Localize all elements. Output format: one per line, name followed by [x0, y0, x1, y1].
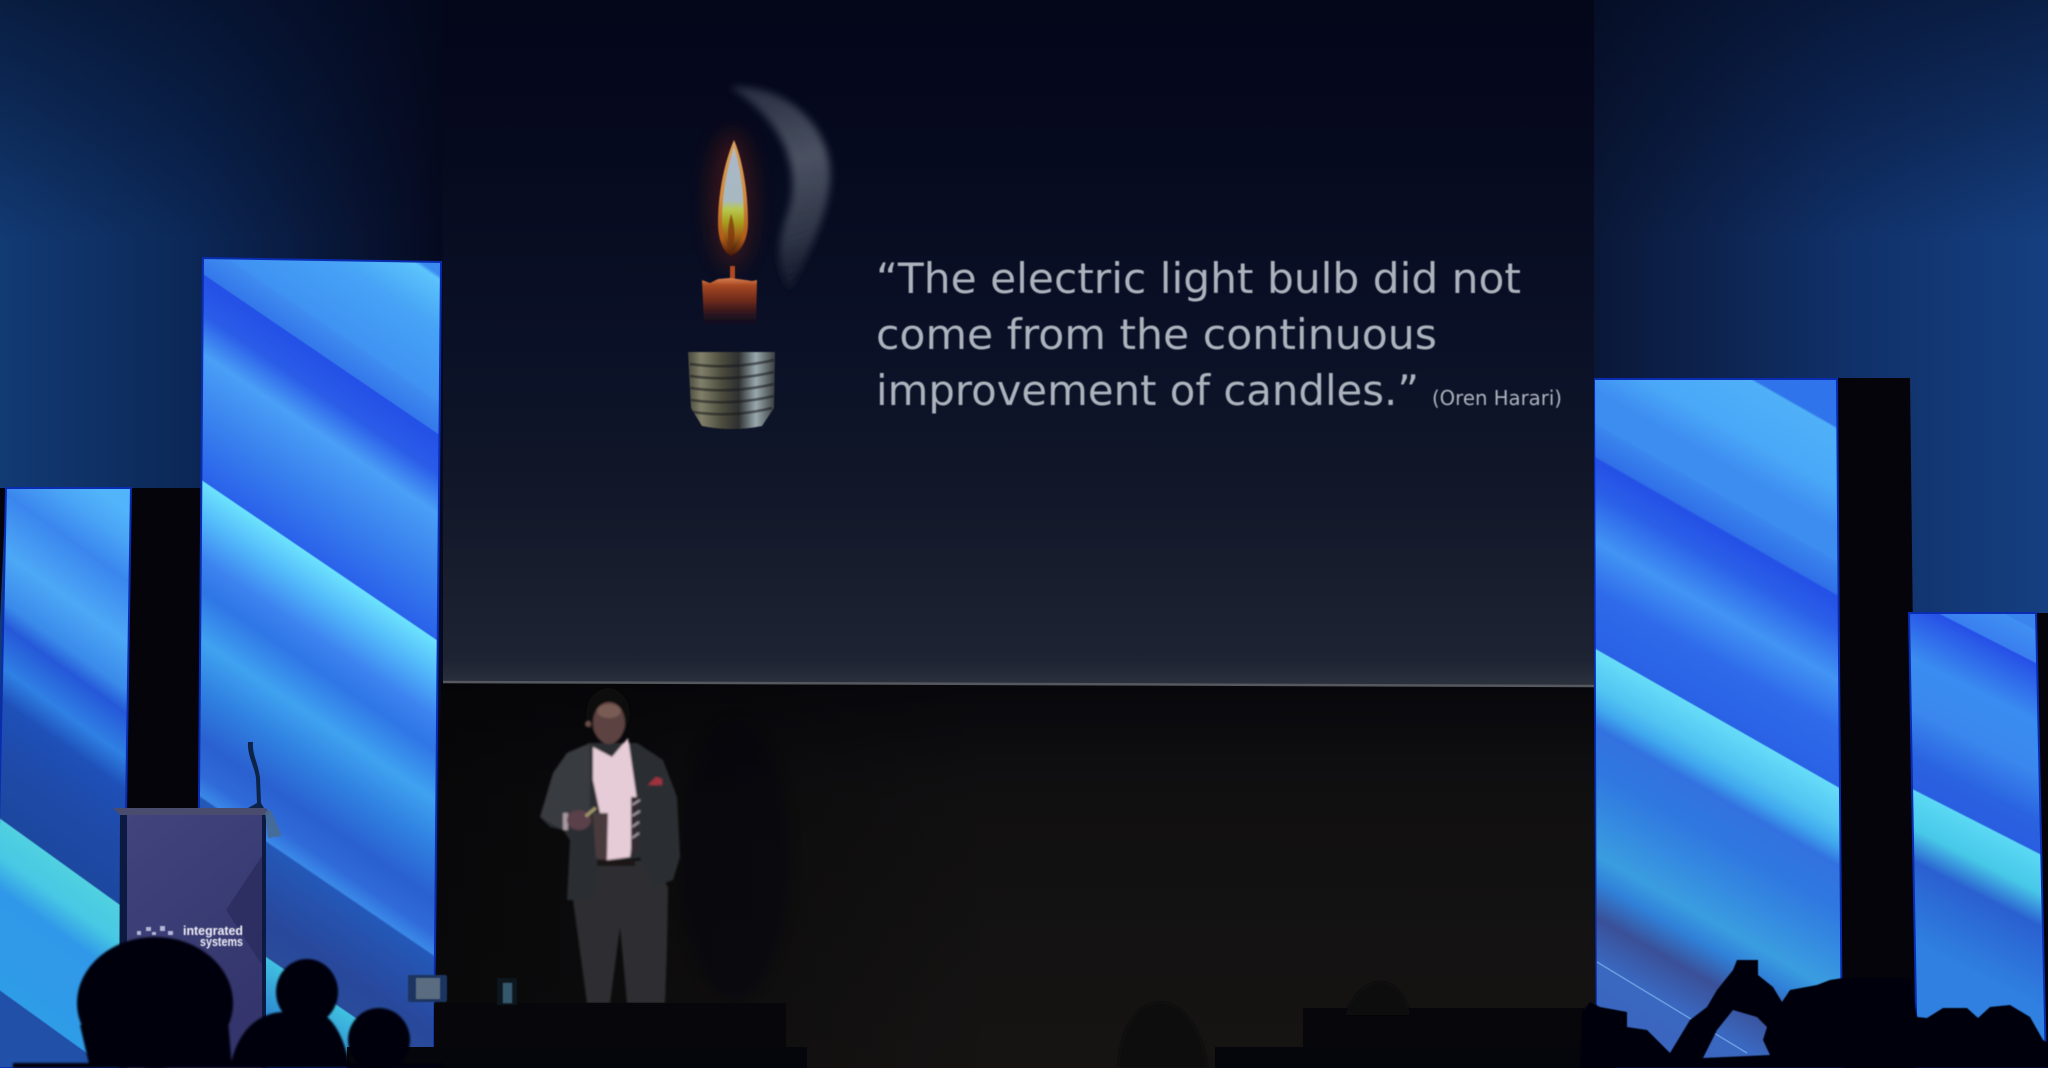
pocket square [648, 777, 662, 785]
podium logo: systems [200, 934, 243, 949]
podium logo: integrated [183, 923, 243, 938]
icon: candle inside light bulb [688, 87, 830, 429]
screw ridges [690, 360, 774, 414]
panel: right small LED wall [1909, 613, 2046, 1068]
candle body [702, 278, 757, 326]
panel: left large LED wall [197, 258, 441, 1068]
tie [631, 797, 640, 856]
shirt shadow [593, 813, 608, 860]
attribution: (Oren Harari) [1432, 386, 1562, 410]
belt [597, 860, 635, 866]
panel: projection screen [443, 0, 1594, 686]
panel: right large LED wall [1594, 379, 1842, 1068]
podium logo [137, 923, 243, 949]
panel: left small LED wall [0, 488, 131, 1068]
audience silhouettes centre [1118, 982, 1410, 1068]
ear [585, 721, 591, 727]
hand with clicker [567, 810, 591, 830]
front stage boxes [347, 1003, 1615, 1068]
shirt cuff [563, 813, 568, 830]
tie stripes [632, 800, 640, 838]
jacket left panel highlight [540, 743, 590, 830]
podium with microphone [113, 742, 282, 1068]
trousers [573, 860, 668, 1003]
speaker shadow on backdrop [680, 720, 790, 1000]
face [593, 702, 625, 744]
quote text: “The electric light bulb did not [876, 254, 1521, 303]
shirt [593, 738, 637, 860]
audience silhouettes right with raised phone [1580, 960, 2048, 1068]
head hair [586, 688, 630, 740]
flame core [722, 147, 744, 251]
quote text [876, 254, 1562, 415]
flame inner dark wick zone [728, 214, 734, 251]
stage floor backdrop [434, 682, 1596, 1068]
speaker [540, 688, 680, 1003]
bulb glass crescent [730, 87, 830, 292]
forehead highlight [597, 704, 621, 718]
black pillars [0, 378, 2048, 1068]
jacket [540, 743, 680, 900]
phones in the audience [408, 975, 517, 1005]
audience silhouettes left [13, 937, 443, 1068]
wick [730, 266, 735, 280]
screw base [688, 352, 775, 429]
candle flame [718, 140, 748, 256]
quote text: improvement of candles.” [876, 366, 1419, 415]
quote text: come from the continuous [876, 310, 1437, 359]
flame glow [710, 132, 754, 268]
